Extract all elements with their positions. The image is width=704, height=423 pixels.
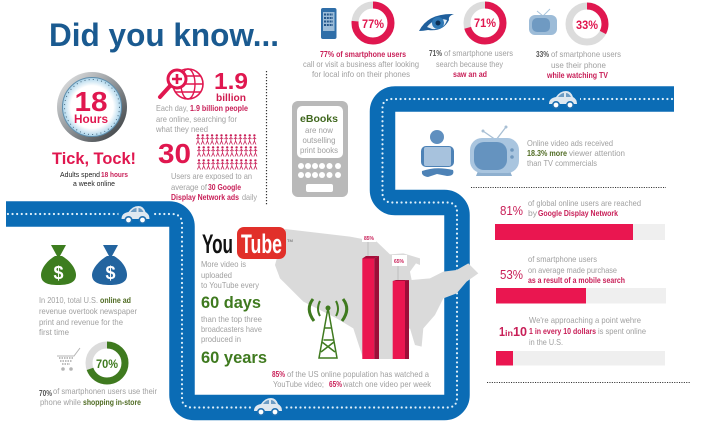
stat text: what they need — [155, 124, 208, 134]
text — [528, 254, 625, 285]
stat number: 1.9 — [214, 68, 248, 94]
caption: 33% — [536, 49, 549, 59]
stat text: are online, searching for — [156, 114, 237, 124]
road — [6, 90, 674, 408]
youtube text: to YouTube every — [201, 280, 260, 290]
icon: signal tower — [309, 299, 347, 358]
text: of smartphone users — [528, 254, 597, 264]
youtube text: More video is — [201, 259, 246, 269]
attention text: Online video ads received — [527, 138, 613, 148]
revenue text: revenue overtook newspaper — [39, 306, 137, 316]
caption — [536, 49, 621, 80]
text: is spent online — [598, 326, 646, 336]
map of the United States — [275, 229, 478, 359]
value: 1 — [499, 325, 505, 339]
caption: while watching TV — [546, 70, 608, 80]
panel: 53% stat — [496, 254, 666, 304]
text — [528, 198, 641, 218]
caption: saw an ad — [453, 69, 487, 79]
donut: 33%: 33% — [576, 20, 598, 32]
stat number: 30 — [158, 138, 191, 169]
attention text: than TV commercials — [527, 158, 597, 168]
revenue text: first time — [39, 327, 69, 337]
tick tock heading: Tick, Tock! — [52, 149, 136, 168]
ebooks text: are now — [305, 125, 334, 135]
icon: magnifier and globe — [160, 69, 203, 99]
clock unit: Hours — [74, 114, 108, 126]
caption: 71% — [429, 48, 442, 58]
caption: of smartphonen users use their — [53, 386, 157, 396]
stat text: average of — [171, 182, 208, 192]
car: top road — [546, 90, 580, 110]
revenue text: online ad — [100, 295, 131, 305]
stat text: 30 Google — [208, 182, 241, 192]
title: Did you know... — [49, 17, 279, 53]
caption: of smartphone users — [551, 49, 621, 59]
icon: blue money bag: $ — [105, 263, 116, 283]
text: of global online users are reached — [528, 198, 641, 208]
youtube caption: of the US online population has watched a — [287, 369, 429, 379]
icon: person with laptop — [421, 130, 454, 177]
car: left road — [118, 205, 152, 225]
caption — [303, 49, 419, 79]
icon: small tv — [529, 9, 557, 35]
panel: clock — [52, 72, 136, 188]
text: as a result of a mobile search — [528, 275, 625, 285]
youtube text: 60 days — [201, 294, 261, 312]
panel: youtube — [201, 227, 478, 389]
value: 53% — [500, 268, 523, 282]
bar — [495, 224, 665, 240]
bar: 65%: 65% — [394, 259, 405, 265]
stat text: Each day, — [156, 103, 188, 113]
ebooks text — [300, 114, 338, 155]
panel: video attention — [421, 126, 625, 177]
youtube caption — [272, 369, 432, 389]
caption: call or visit a business after looking — [303, 59, 419, 69]
icon: clock — [57, 72, 127, 142]
youtube logo — [202, 227, 293, 259]
panel: smartphone 77% — [303, 5, 419, 79]
youtube caption: 85% — [272, 369, 285, 379]
youtube text: uploaded — [201, 270, 232, 280]
caption: use their phone — [551, 60, 606, 70]
value: 81% — [500, 204, 523, 218]
bar: 85% — [362, 234, 379, 359]
revenue text: print and revenue for the — [39, 317, 123, 327]
ebooks text: eBooks — [300, 114, 338, 125]
text: Google Display Network — [538, 208, 618, 218]
revenue text — [39, 295, 137, 337]
icon: cart — [57, 348, 80, 371]
caption: 70% — [39, 388, 52, 398]
clock caption: 18 hours — [101, 170, 128, 179]
youtube text — [201, 259, 267, 367]
caption: for local info on their phones — [312, 69, 410, 79]
ebooks text: print books — [300, 145, 338, 155]
attention text: viewer attention — [569, 148, 625, 158]
value: in — [505, 329, 513, 338]
youtube caption: YouTube video; — [273, 379, 324, 389]
icon: tv — [470, 126, 519, 176]
caption: of smartphone users — [444, 48, 513, 58]
youtube logo: TM — [287, 238, 293, 243]
panel: ebooks — [292, 101, 348, 197]
icon: people grid — [196, 134, 257, 170]
donut: 77%: 77% — [362, 19, 384, 31]
youtube text: than the top three — [201, 314, 262, 324]
donut: 70%: 70% — [96, 359, 118, 371]
caption: 77% of smartphone users — [320, 49, 406, 59]
revenue text: In 2010, total U.S. — [39, 295, 98, 305]
bar — [496, 288, 666, 304]
stat text: daily — [242, 192, 258, 202]
youtube caption: 65% — [329, 379, 342, 389]
stat unit: billion — [216, 92, 246, 104]
youtube text: produced in — [201, 334, 241, 344]
stat text: 1.9 billion people — [190, 103, 248, 113]
value — [499, 325, 527, 339]
clock caption — [60, 170, 128, 188]
caption: shopping in-store — [83, 397, 141, 407]
donut: 71%: 71% — [474, 18, 496, 30]
caption: phone while — [40, 397, 81, 407]
youtube caption: watch one video per week — [342, 379, 432, 389]
panel: smartphone 71% — [419, 5, 513, 79]
panel: shopping in-store — [39, 345, 157, 407]
bar: 85%: 85% — [364, 236, 375, 242]
panel: 1 in 10 stat — [496, 315, 665, 366]
ebooks text: outselling — [302, 135, 336, 145]
stat text — [171, 171, 258, 202]
panel: smartphone 33% — [529, 6, 621, 80]
icon: ereader — [292, 101, 348, 197]
icon: eye — [419, 14, 454, 31]
text: by — [528, 208, 538, 218]
caption — [429, 48, 513, 79]
caption: search because they — [436, 59, 504, 69]
bar: 65% — [392, 255, 409, 359]
stat text: Display Network ads — [171, 192, 239, 202]
panel: 81% stat — [495, 198, 665, 240]
caption — [39, 386, 157, 407]
text — [529, 315, 646, 347]
clock caption: Adults spend — [60, 170, 100, 179]
youtube text: broadcasters have — [201, 324, 262, 334]
text: 1 in every 10 dollars — [529, 326, 596, 336]
youtube logo: You — [202, 229, 233, 259]
text: on average made purchase — [528, 265, 617, 275]
attention text — [527, 138, 625, 168]
panel: display network users — [158, 134, 258, 202]
clock caption: a week online — [73, 179, 115, 188]
bar — [496, 351, 665, 366]
stat text: Users are exposed to an — [171, 171, 252, 181]
text: in the U.S. — [529, 337, 563, 347]
icon: green money bag: $ — [53, 263, 64, 283]
youtube logo: Tube — [241, 229, 282, 259]
text: We're approaching a point wehre — [529, 315, 641, 325]
clock number: 18 — [74, 86, 108, 117]
stat text — [155, 103, 248, 134]
icon: phone — [321, 8, 336, 39]
attention text: 18.3% more — [527, 148, 567, 158]
panel: search stat — [155, 68, 248, 134]
car: bottom road — [251, 397, 285, 417]
value: 10 — [513, 325, 527, 339]
youtube text: 60 years — [201, 349, 267, 367]
panel: online ad revenue — [39, 245, 137, 337]
